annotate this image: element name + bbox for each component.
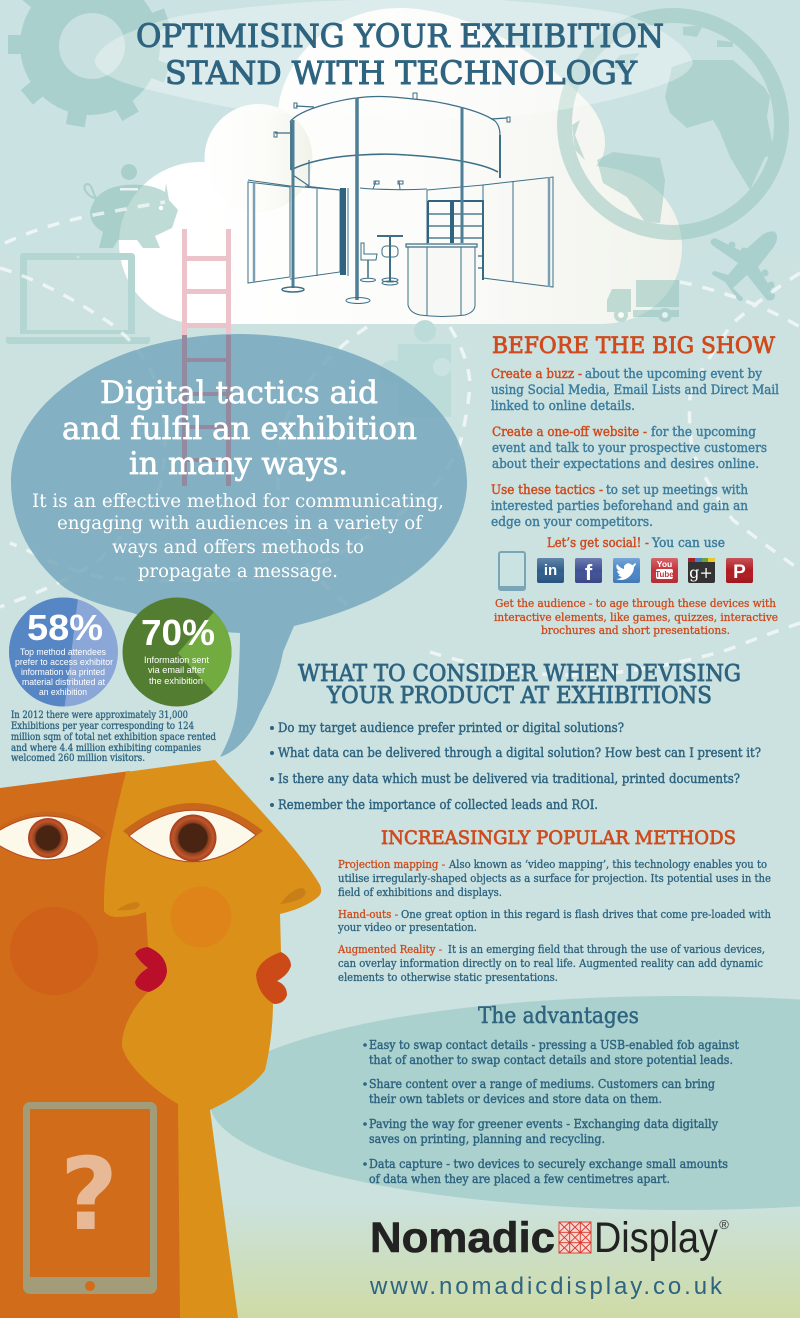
panel: the advantages bbox=[363, 1004, 739, 1186]
orange lips bbox=[256, 952, 291, 1004]
icon: youtube bbox=[651, 558, 678, 583]
tips: You can use bbox=[651, 536, 725, 551]
icon: facebook bbox=[575, 558, 602, 585]
bullet list: What data can be delivered through a digital solution? How best can I present it? bbox=[278, 746, 761, 761]
tips: Let’s get social! - bbox=[547, 536, 649, 551]
advantages ellipse bbox=[210, 996, 800, 1210]
exhibition statistics text: Exhibitions per year corresponding to 124 bbox=[11, 721, 194, 732]
heading: The advantages bbox=[478, 1004, 639, 1029]
stat: 58%: prefer to access exhibitor bbox=[15, 657, 113, 668]
title: OPTIMISING YOUR EXHIBITION bbox=[136, 17, 664, 55]
methods text: field of exhibitions and displays. bbox=[338, 886, 502, 899]
logo: Nomadic Display: ® bbox=[719, 1217, 729, 1232]
swoosh highlight bbox=[95, 0, 693, 119]
tips: for the upcoming bbox=[651, 425, 756, 440]
icon: pinterest bbox=[726, 558, 753, 583]
stat: 58%: 58% bbox=[27, 607, 103, 648]
heading: WHAT TO CONSIDER WHEN DEVISING bbox=[298, 661, 741, 687]
nostrils bbox=[117, 888, 306, 910]
ladder bbox=[182, 229, 231, 335]
stat: 70%: Information sent bbox=[144, 655, 209, 666]
right eye bbox=[123, 803, 263, 862]
audience text bbox=[494, 597, 778, 637]
stat: 70%: 70% bbox=[141, 612, 215, 653]
stat: 58%: an exhibition bbox=[39, 687, 87, 698]
advantages list: Data capture - two devices to securely exchange small amounts bbox=[369, 1156, 728, 1171]
social media icons bbox=[537, 558, 753, 585]
methods text: elements to otherwise static presentations. bbox=[338, 971, 558, 984]
bubble body: ways and offers methods to bbox=[112, 536, 364, 558]
heading: INCREASINGLY POPULAR METHODS bbox=[381, 827, 736, 849]
illustration: two faces bbox=[0, 760, 321, 1318]
icon: puzzle piece bbox=[380, 320, 451, 417]
icon: linkedin bbox=[537, 558, 564, 583]
bubble headline: Digital tactics aid bbox=[100, 375, 378, 411]
bubble body: propagate a message. bbox=[138, 560, 338, 582]
logo: Nomadic Display: Display bbox=[594, 1214, 718, 1262]
icon: pinterest: P bbox=[733, 562, 746, 583]
stat: 58% bbox=[9, 598, 118, 706]
title: STAND WITH TECHNOLOGY bbox=[165, 54, 638, 92]
bubble text bbox=[32, 375, 444, 582]
icon: globe bbox=[557, 8, 789, 240]
exhibition statistics text: million sqm of total net exhibition space rented bbox=[11, 732, 216, 743]
right cheek bbox=[170, 886, 232, 948]
methods text: It is an emerging field that through the use of various devices, bbox=[448, 943, 765, 956]
icon: tablet with question mark: ? bbox=[60, 1136, 118, 1253]
icon: piggy bank bbox=[84, 164, 178, 248]
tips: Create a buzz - bbox=[491, 367, 582, 382]
icon: linkedin: in bbox=[544, 562, 557, 579]
cloud behind the stand bbox=[119, 8, 682, 324]
tips: Use these tactics - bbox=[491, 483, 603, 498]
tips: about their expectations and desires online. bbox=[492, 457, 759, 472]
bubble headline: in many ways. bbox=[129, 446, 348, 482]
panel: what to consider bbox=[270, 661, 761, 813]
tips: edge on your competitors. bbox=[491, 515, 653, 530]
stat: 58%: material distributed at bbox=[22, 677, 105, 688]
exhibition statistics text: In 2012 there were approximately 31,000 bbox=[11, 710, 188, 721]
icon: twitter bbox=[613, 558, 640, 583]
bullet list: Is there any data which must be delivered via traditional, printed documents? bbox=[278, 772, 740, 787]
advantages list: of data when they are placed a few centimetres apart. bbox=[369, 1171, 670, 1186]
tips: to set up meetings with bbox=[606, 483, 749, 498]
tips: event and talk to your prospective customers bbox=[492, 441, 767, 456]
tips: Create a one-off website - bbox=[492, 425, 647, 440]
icon: youtube: Tube bbox=[655, 570, 674, 579]
bubble body bbox=[32, 490, 444, 582]
methods text: One great option in this regard is flash drives that come pre-loaded with bbox=[401, 908, 771, 921]
panel: increasingly popular methods bbox=[337, 827, 771, 984]
dashed connector lines bbox=[0, 202, 800, 675]
methods text: Also known as ‘video mapping’, this technology enables you to bbox=[448, 858, 767, 871]
bubble headline: and fulfil an exhibition bbox=[62, 411, 417, 447]
audience text: brochures and short presentations. bbox=[541, 624, 730, 637]
icon: gear bbox=[8, 0, 170, 127]
icon: youtube: You bbox=[657, 559, 672, 569]
stat: 70%: via email after bbox=[148, 665, 205, 676]
stat: 58%: information via printed bbox=[21, 667, 105, 678]
methods text: utilise irregularly-shaped objects as a surface for projection. Its potential uses in the bbox=[338, 872, 771, 885]
heading: BEFORE THE BIG SHOW bbox=[492, 334, 775, 359]
advantages list bbox=[363, 1037, 739, 1186]
logo mark bbox=[559, 1222, 591, 1253]
bullet list: Do my target audience prefer printed or digital solutions? bbox=[278, 721, 624, 736]
icon: facebook: f bbox=[585, 560, 593, 585]
title bbox=[136, 17, 664, 92]
advantages list: that of another to swap contact details and store potential leads. bbox=[369, 1052, 733, 1067]
back face bbox=[0, 771, 182, 1318]
red lips bbox=[135, 947, 167, 992]
methods text: Augmented Reality - bbox=[337, 943, 442, 956]
tips: using Social Media, Email Lists and Direct Mail bbox=[491, 383, 779, 398]
panel: before the big show bbox=[491, 334, 779, 637]
methods text: Hand-outs - bbox=[338, 908, 398, 921]
ladder seen through bubble bbox=[182, 335, 231, 486]
exhibition statistics text bbox=[11, 710, 216, 764]
audience text: interactive elements, like games, quizzes, interactive bbox=[494, 611, 778, 624]
icon: airplane bbox=[711, 231, 777, 301]
methods text: your video or presentation. bbox=[337, 921, 477, 934]
icon: delivery truck bbox=[607, 280, 679, 322]
tips: about the upcoming event by bbox=[585, 367, 763, 382]
audience text: Get the audience - to age through these devices with bbox=[495, 597, 776, 610]
tips: linked to online details. bbox=[491, 399, 635, 414]
bullet list: Remember the importance of collected leads and ROI. bbox=[278, 798, 598, 813]
methods text: Projection mapping - bbox=[338, 858, 445, 871]
front face bbox=[104, 760, 321, 1318]
advantages list: Paving the way for greener events - Exchanging data digitally bbox=[369, 1116, 719, 1131]
heading bbox=[298, 661, 741, 709]
stat: 58%: Top method attendees bbox=[20, 647, 106, 658]
bubble body: engaging with audiences in a variety of bbox=[57, 512, 424, 534]
advantages list: their own tablets or devices and store data on them. bbox=[369, 1091, 662, 1106]
website url: www.nomadicdisplay.co.uk bbox=[369, 1273, 723, 1300]
advantages list: saves on printing, planning and recycling. bbox=[369, 1131, 605, 1146]
stat: 70%: the exhibition bbox=[149, 676, 203, 687]
exhibition statistics text: and where 4.4 million exhibiting companies bbox=[11, 743, 201, 754]
bubble headline bbox=[62, 375, 417, 482]
icon: google plus bbox=[688, 558, 715, 583]
exhibition statistics text: welcomed 260 million visitors. bbox=[11, 753, 145, 764]
bullet list bbox=[270, 721, 761, 813]
exhibition stand drawing bbox=[248, 93, 553, 316]
logo: Nomadic Display: Nomadic bbox=[370, 1214, 555, 1262]
bubble body: It is an effective method for communicating, bbox=[32, 490, 444, 512]
stat: 70% bbox=[122, 598, 232, 706]
speech bubble bbox=[11, 334, 467, 757]
cloud lobe bbox=[204, 104, 312, 212]
tips bbox=[491, 367, 779, 551]
logo: Nomadic Display bbox=[370, 1214, 729, 1262]
advantages list: Share content over a range of mediums. Customers can bring bbox=[369, 1076, 715, 1091]
icon: tablet with question mark bbox=[23, 1102, 157, 1294]
icon: tablet bbox=[499, 552, 525, 590]
left eye bbox=[0, 812, 107, 860]
methods text bbox=[337, 858, 771, 984]
icon: google plus: g+ bbox=[689, 563, 713, 582]
heading: YOUR PRODUCT AT EXHIBITIONS bbox=[326, 683, 712, 709]
tips: interested parties beforehand and gain an bbox=[491, 499, 749, 514]
advantages list: Easy to swap contact details - pressing a USB-enabled fob against bbox=[369, 1037, 739, 1052]
icon: laptop bbox=[6, 253, 150, 344]
left cheek bbox=[10, 907, 98, 995]
methods text: can overlay information directly on to real life. Augmented reality can add dynamic bbox=[338, 957, 763, 970]
